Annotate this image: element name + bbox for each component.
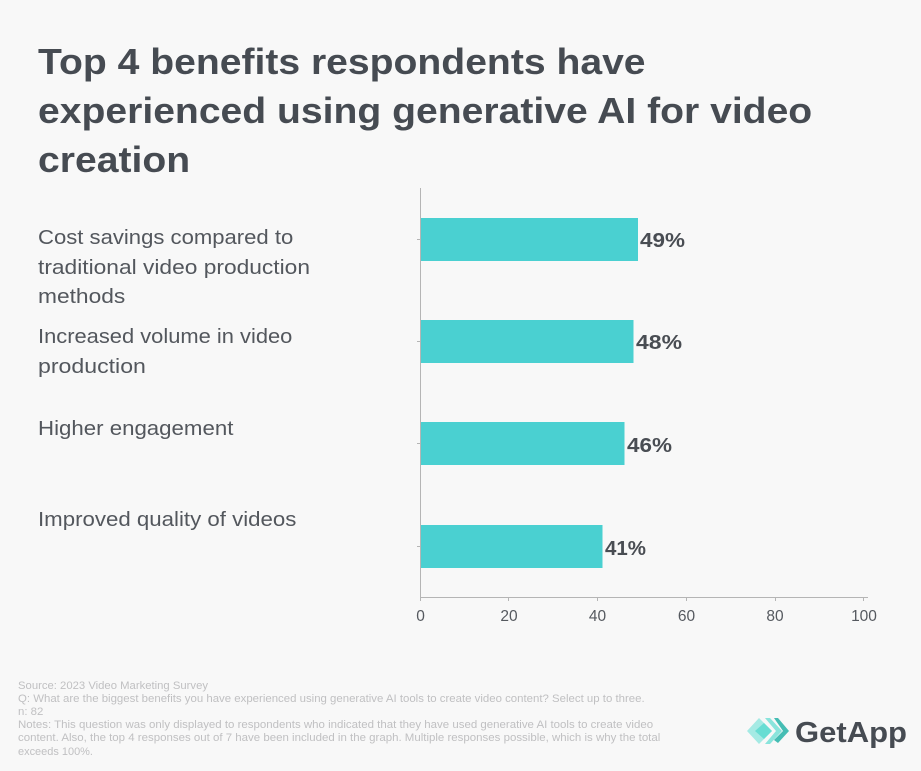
bar: 48% [421, 320, 682, 363]
icon: diamonds [747, 718, 789, 744]
bar: 46%: 46% [627, 434, 672, 457]
bar: 49% [421, 218, 685, 261]
bar: 41% [421, 525, 646, 568]
bar: 48%: 48% [636, 331, 682, 354]
source and notes [18, 680, 660, 758]
source and notes: Notes: This question was only displayed to respondents who indicated that they have used generative AI tools to create video [18, 719, 653, 731]
category label: cost savings: traditional video production [38, 256, 310, 278]
bar: 49%: 49% [640, 229, 685, 252]
logo wordmark: GetApp [795, 717, 907, 749]
category label: increased volume: production [38, 354, 146, 378]
logo: GetApp [747, 717, 907, 749]
x axis labels: 80 [766, 608, 784, 625]
category label: improved quality: Improved quality of videos [38, 508, 296, 531]
source and notes: content. Also, the top 4 responses out of 7 have been included in the graph. Multiple responses possible, which is why the total [18, 732, 660, 744]
x axis labels [416, 608, 877, 625]
title: creation [38, 139, 190, 180]
source and notes: n: 82 [18, 706, 43, 718]
source and notes: Q: What are the biggest benefits you have experienced using generative AI tools to create video content? Select up to three. [18, 693, 645, 705]
x axis labels: 20 [500, 608, 518, 625]
category label: cost savings: methods [38, 285, 125, 308]
category label: cost savings: Cost savings compared to [38, 226, 293, 249]
x axis labels: 40 [589, 608, 606, 625]
category label: higher engagement: Higher engagement [38, 417, 233, 440]
source and notes: exceeds 100%. [18, 746, 93, 758]
category label: increased volume [38, 325, 292, 378]
source and notes: Source: 2023 Video Marketing Survey [18, 680, 208, 692]
x axis labels: 100 [851, 608, 877, 625]
x axis labels: 60 [678, 608, 695, 625]
category label: cost savings [38, 226, 310, 308]
bar: 41%: 41% [605, 537, 646, 560]
title [38, 41, 812, 180]
bar: 46% [421, 422, 672, 465]
x axis labels: 0 [416, 608, 425, 625]
category label: increased volume: Increased volume in video [38, 325, 292, 348]
title: experienced using generative AI for video [38, 90, 812, 131]
title: Top 4 benefits respondents have [38, 41, 646, 82]
